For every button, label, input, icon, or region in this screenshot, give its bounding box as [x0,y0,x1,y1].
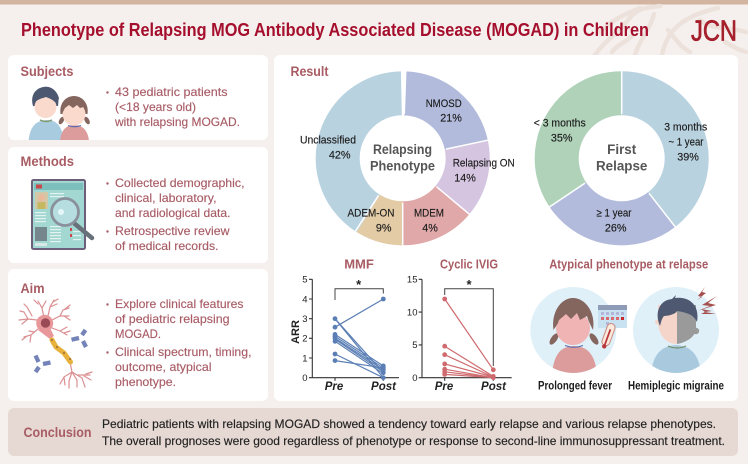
text: methods: and radiological data. [115,206,230,220]
panel: subjects [8,55,268,141]
background brain texture [595,6,746,55]
text: aim [106,297,252,389]
donut chart: relapsing phenotype: 42% [329,150,351,162]
text: methods: Retrospective review [115,224,230,238]
top band [0,0,748,4]
donut chart: relapsing phenotype: Relapsing ON [453,158,515,170]
chart: MMF: * [356,277,362,292]
heading: methods: Methods [20,154,74,169]
donut chart: relapsing phenotype: 14% [454,173,476,185]
text: aim: MOGAD. [115,327,161,341]
chart: MMF: ARR [290,320,302,344]
panel: result [274,55,738,401]
panel: methods [8,147,268,263]
icon: EMR with magnifier [31,179,92,250]
donut chart: first relapse: 39% [677,152,699,164]
donut chart: relapsing phenotype: Phenotype [370,159,435,174]
chart: MMF: 1 [302,353,308,364]
title: Phenotype of Relapsing MOG Antibody Associated Disease (MOGAD) in Children [21,20,649,40]
text: aim: phenotype. [115,375,176,389]
chart: cyclic IVIG: 5 [412,340,418,351]
chart: MMF [290,256,399,393]
text: methods: Collected demographic, [115,176,244,190]
heading: subjects: Subjects [20,64,74,79]
donut chart: first relapse: ≥ 1 year [596,208,632,220]
icon: hemiplegic migraine [633,287,719,376]
donut chart: first relapse [530,67,713,250]
donut chart: relapsing phenotype: 21% [440,112,462,124]
label: hemiplegic migraine: Hemiplegic migraine [628,380,724,392]
chart: MMF: 2 [302,334,308,345]
chart: cyclic IVIG: 10 [407,307,418,318]
text: aim: outcome, atypical [115,360,212,374]
donut chart: relapsing phenotype: 9% [376,223,392,235]
text: subjects: with relapsing MOGAD. [114,115,240,129]
chart: cyclic IVIG: * [466,277,472,292]
text: subjects [106,85,240,129]
icon: two children [28,87,91,141]
text: aim: Explore clinical features [115,297,244,311]
journal logo: JCN [691,16,737,48]
text: conclusion [102,417,725,448]
text: subjects: (<18 years old) [115,100,196,114]
chart: cyclic IVIG: Pre [435,381,454,393]
icon: neuron with antibodies [19,299,92,388]
text: methods: of medical records. [115,239,218,253]
chart: cyclic IVIG: 0 [412,373,418,384]
text: subjects: 43 pediatric patients [115,85,228,99]
icon: thermometer [600,322,616,350]
text: aim: Clinical spectrum, timing, [115,345,252,359]
donut chart: first relapse: 26% [605,223,627,235]
chart: cyclic IVIG: Cyclic IVIG [440,256,498,271]
heading: aim: Aim [20,281,44,296]
chart: cyclic IVIG: Post [481,381,507,393]
text: conclusion: The overall prognoses were good regardless of phenotype or response to second-line immunosuppressant treatment. [102,434,725,448]
text: aim: of pediatric relapsing [115,312,230,326]
donut chart: relapsing phenotype: 4% [422,223,438,235]
label: prolonged fever: Prolonged fever [538,380,612,392]
chart: cyclic IVIG [407,256,512,393]
chart: MMF: 0 [302,373,308,384]
chart: MMF: MMF [344,256,374,271]
donut chart: relapsing phenotype: Relapsing [373,142,432,157]
chart: MMF: Post [371,381,397,393]
donut chart: first relapse: < 3 months [534,118,586,130]
heading: conclusion: Conclusion [24,425,92,440]
donut chart: relapsing phenotype: NMOSD [426,98,462,110]
donut chart: relapsing phenotype [300,67,515,250]
chart: MMF: 4 [302,294,308,305]
donut chart: first relapse: 3 months [664,122,708,134]
donut chart: first relapse: ~ 1 year [668,137,704,149]
donut chart: relapsing phenotype: ADEM-ON [348,208,394,220]
donut chart: first relapse: First [607,142,637,157]
text: conclusion: Pediatric patients with relapsing MOGAD showed a tendency toward early relapse and various relapse phenotypes. [102,417,716,431]
text: methods: clinical, laboratory, [115,191,216,205]
text: methods [106,176,244,253]
icon: calendar [598,305,627,328]
heading: atypical phenotype: Atypical phenotype at relapse [549,256,708,271]
heading: result: Result [290,64,329,79]
donut chart: relapsing phenotype: Unclassified [300,135,356,147]
icon: prolonged fever [530,287,627,376]
icon: lightning bolts [697,287,717,314]
donut chart: relapsing phenotype: MDEM [414,208,444,220]
chart: MMF: 3 [302,314,308,325]
panel: aim [8,269,268,401]
chart: MMF: Pre [325,381,344,393]
chart: MMF: 5 [302,275,308,286]
donut chart: first relapse: Relapse [596,159,647,174]
donut chart: first relapse: 35% [551,133,573,145]
chart: cyclic IVIG: 15 [407,275,418,286]
panel: conclusion [8,408,738,456]
